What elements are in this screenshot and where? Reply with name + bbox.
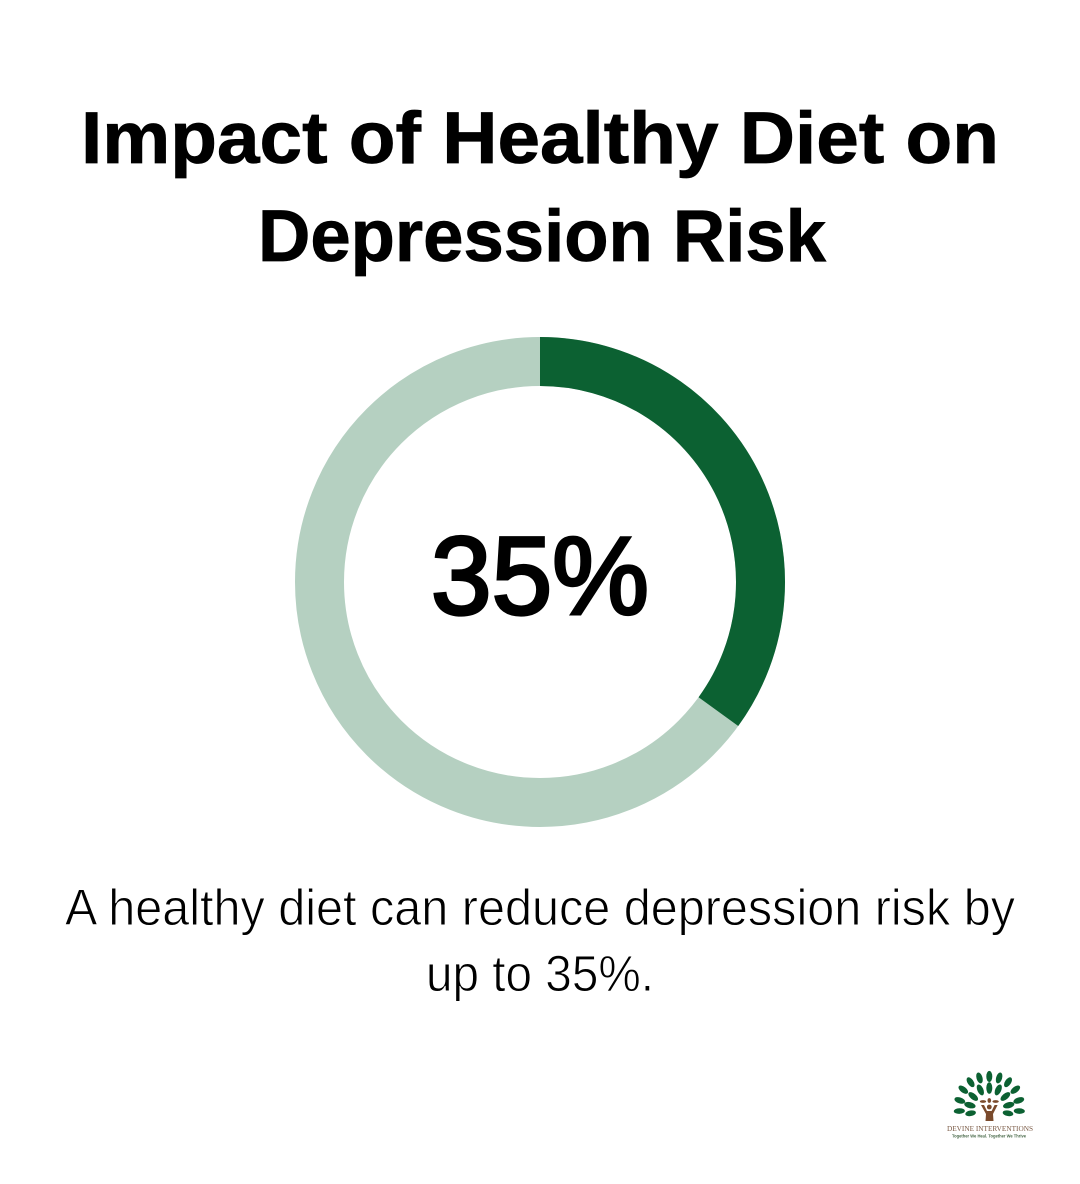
title: Depression Risk xyxy=(258,196,826,277)
description text: A healthy diet can reduce depression risk by xyxy=(65,879,1015,936)
logo tagline: Together We Heal. Together We Thrive xyxy=(952,1134,1026,1138)
description text xyxy=(65,879,1015,1002)
icon: tree xyxy=(954,1071,1025,1121)
title xyxy=(81,98,999,277)
logo: Devine Interventions xyxy=(947,1071,1033,1138)
title: Impact of Healthy Diet on xyxy=(81,98,999,179)
donut value: 35% xyxy=(431,515,649,638)
description text: up to 35%. xyxy=(426,945,654,1002)
donut chart: 35 percent xyxy=(320,362,761,802)
logo name: DEVINE INTERVENTIONS xyxy=(947,1125,1033,1133)
